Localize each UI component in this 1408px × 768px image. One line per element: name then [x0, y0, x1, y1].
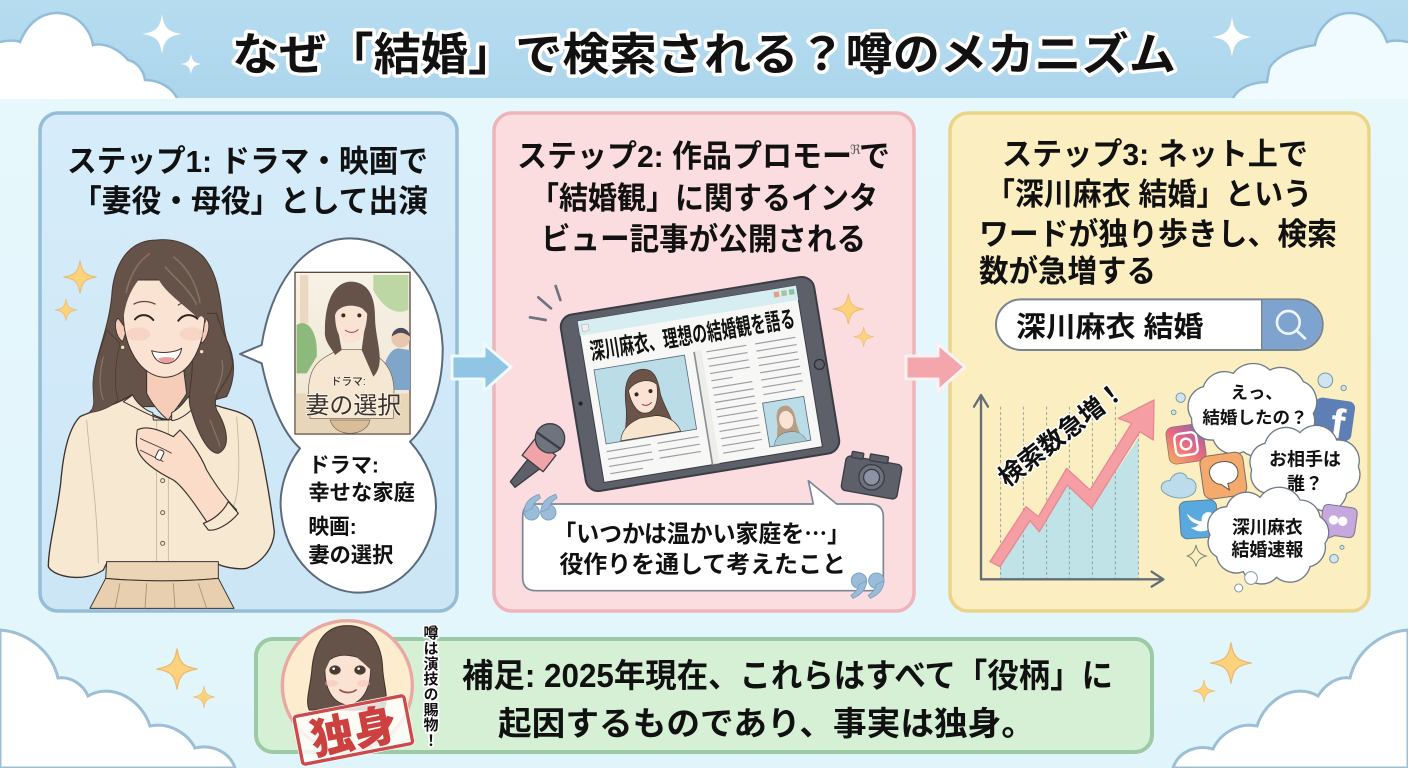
tablet with article [559, 275, 841, 493]
cloud: small blue [1161, 473, 1196, 498]
step 3 heading: ステップ3: ネット上で [1002, 137, 1308, 172]
arrow: step 2 to step 3 [906, 344, 965, 391]
icon: facebook [1310, 397, 1356, 449]
vertical caption: 噂は演技の賜物！ [421, 625, 438, 748]
sparkles: bottom left [156, 648, 215, 708]
bubble text: 幸せな家庭 [308, 481, 415, 505]
step 2 heading: ステップ2: 作品プロモー [517, 139, 852, 174]
line chart: search surge [974, 377, 1163, 587]
step 3 heading: 数が急増する [979, 254, 1156, 289]
icon: facebook: f [1328, 399, 1348, 448]
step 2 heading: ビュー記事が公開される [541, 222, 866, 257]
panel: step 1 [40, 113, 457, 611]
drama poster: ドラマ: [331, 376, 366, 388]
icon: instagram [1165, 423, 1207, 465]
cloud 3: breaking news [1208, 487, 1329, 584]
cloud 1: reaction: 結婚したの？ [1202, 407, 1308, 427]
step 1 heading: 「妻役・母役」として出演 [72, 184, 428, 219]
cloud 1: reaction [1188, 364, 1317, 456]
microphone [510, 424, 565, 487]
note text: 起因するものであり、事実は独身。 [498, 705, 1035, 742]
emphasis dashes [530, 286, 560, 320]
closing quote mark [851, 573, 884, 598]
step 1 heading: ステップ1: ドラマ・映画で [67, 144, 428, 179]
step 3 heading: ワードが独り歩きし、検索 [979, 217, 1337, 252]
sparkles: tablet right [833, 294, 874, 347]
step 3 heading [979, 137, 1337, 289]
illustration: smiling woman [48, 240, 274, 608]
sparkle: title right [1212, 17, 1252, 57]
step 2 heading: 「結婚観」に関するインタ [530, 181, 878, 216]
cloud 2: reaction: お相手は [1269, 450, 1341, 470]
cloud 3: breaking news: 結婚速報 [1231, 539, 1303, 560]
opening quote mark [524, 494, 557, 520]
note text: 補足: 2025年現在、これらはすべて「役柄」に [462, 657, 1113, 694]
tablet with article: 深川麻衣、理想の結婚観を語る [588, 306, 797, 365]
sparkles: bottom right [1193, 642, 1252, 702]
quote callout: 役作りを通して考えたこと [559, 552, 846, 579]
panel: step 3 [950, 113, 1369, 611]
cloud: bottom left [0, 630, 235, 768]
bubble text [308, 454, 415, 568]
article text lines [593, 337, 812, 474]
small photo [763, 396, 811, 447]
cloud 2: reaction [1250, 425, 1360, 514]
bubble text: ドラマ: [308, 454, 379, 478]
speech bubble: roles [240, 238, 443, 593]
sparkles beside woman [55, 260, 96, 321]
quote callout: 「いつかは温かい家庭を…」 [553, 514, 850, 549]
step 3 heading: 「深川麻衣 結婚」という [986, 177, 1312, 212]
step 1 heading [67, 144, 428, 219]
step 2 heading [517, 139, 890, 257]
drama poster [295, 272, 410, 434]
thought bubbles and dots [1171, 373, 1346, 592]
sparkles: title left [142, 14, 202, 74]
arrow: step 1 to step 2 [452, 344, 511, 391]
step 2 heading: ℜ [850, 142, 861, 157]
stamp: single: 独身 [307, 701, 401, 765]
social icons and reactions [1161, 364, 1360, 592]
panel: note [256, 621, 1152, 767]
icon: orange chat [1199, 451, 1248, 500]
bubble text: 妻の選択 [308, 544, 394, 568]
avatar portrait [282, 621, 412, 751]
cloud: top right [1233, 13, 1408, 99]
panel: step 2 [494, 113, 914, 611]
cloud: bottom right [1173, 630, 1408, 768]
main photo [594, 355, 697, 444]
note text [462, 657, 1113, 742]
icon: twitter [1179, 499, 1219, 539]
drama poster: 妻の選択 [305, 392, 401, 419]
step 2 heading: で [859, 139, 890, 174]
cloud: top left [0, 13, 177, 99]
icon: purple chat [1319, 504, 1358, 544]
cloud 1: reaction: えっ、 [1231, 382, 1283, 402]
camera [841, 450, 903, 500]
cloud 3: breaking news: 深川麻衣 [1232, 516, 1303, 537]
search bar: 深川麻衣 結婚 [1016, 312, 1203, 344]
quote callout [523, 481, 884, 598]
line chart: search surge: 検索数急増！ [994, 377, 1131, 492]
title: なぜ「結婚」で検索される？噂のメカニズム [232, 29, 1176, 80]
icon: magnifier [1277, 311, 1305, 338]
stamp: single [294, 695, 413, 767]
search bar [996, 299, 1323, 350]
bubble text: 映画: [308, 515, 357, 539]
cloud 2: reaction: 誰？ [1287, 474, 1323, 494]
header band [0, 0, 1408, 98]
